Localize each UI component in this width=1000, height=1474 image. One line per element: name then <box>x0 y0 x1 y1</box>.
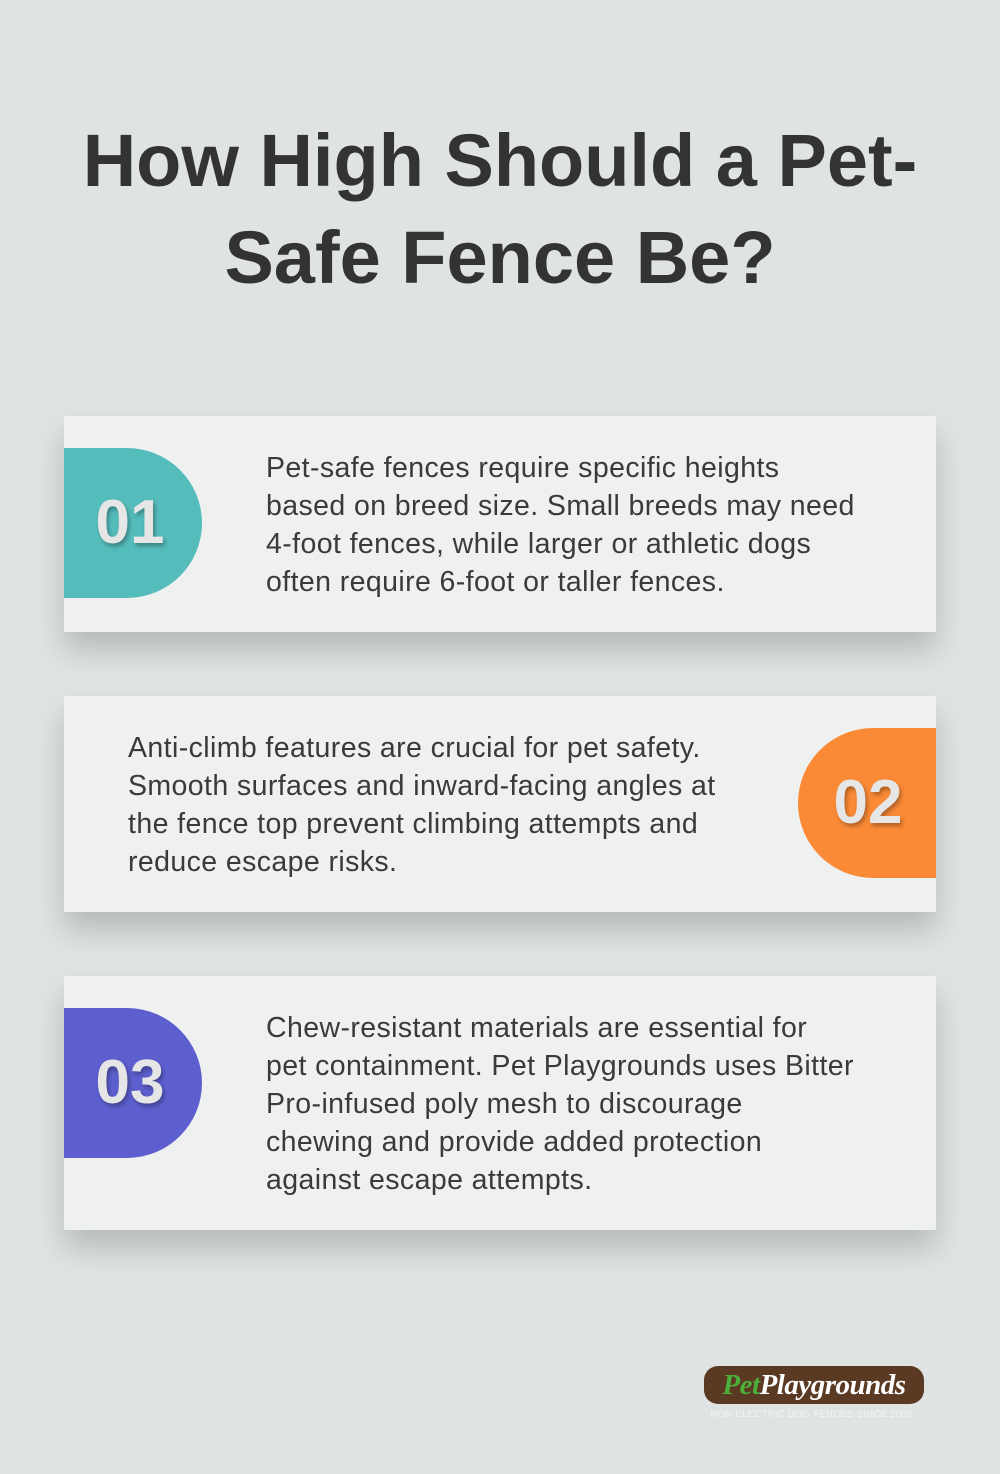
text 3 <box>266 1012 854 1196</box>
text 2: Smooth surfaces and inward-facing angles at <box>128 770 716 802</box>
badge 01 <box>64 448 202 598</box>
text 3: chewing and provide added protection <box>266 1126 762 1158</box>
badge 01: 01 <box>96 488 164 557</box>
text 1: often require 6-foot or taller fences. <box>266 566 725 598</box>
panel: card 1 <box>64 416 936 632</box>
title: How High Should a Pet- <box>83 119 917 202</box>
badge 03 <box>64 1008 202 1158</box>
title <box>83 119 917 299</box>
title: Safe Fence Be? <box>224 216 776 299</box>
text 2: Anti-climb features are crucial for pet safety. <box>128 732 701 764</box>
logo: PetPlaygrounds <box>722 1369 906 1401</box>
text 1: Pet-safe fences require specific heights <box>266 452 779 484</box>
logo: NON-ELECTRIC DOG FENCES SINCE 2008 <box>710 1409 912 1420</box>
text 1: based on breed size. Small breeds may need <box>266 490 855 522</box>
badge 03: 03 <box>96 1048 164 1117</box>
badge 02: 02 <box>834 768 902 837</box>
logo <box>704 1366 924 1420</box>
badge 02 <box>798 728 936 878</box>
text 3: against escape attempts. <box>266 1164 592 1196</box>
panel: card 3 <box>64 976 936 1230</box>
text 3: Pro-infused poly mesh to discourage <box>266 1088 743 1120</box>
text 2: the fence top prevent climbing attempts and <box>128 808 698 840</box>
text 2 <box>128 732 716 878</box>
panel: card 2 <box>64 696 936 912</box>
text 1 <box>266 452 855 598</box>
text 1: 4-foot fences, while larger or athletic dogs <box>266 528 811 560</box>
text 3: pet containment. Pet Playgrounds uses Bitter <box>266 1050 854 1082</box>
text 3: Chew-resistant materials are essential for <box>266 1012 807 1044</box>
text 2: reduce escape risks. <box>128 846 397 878</box>
